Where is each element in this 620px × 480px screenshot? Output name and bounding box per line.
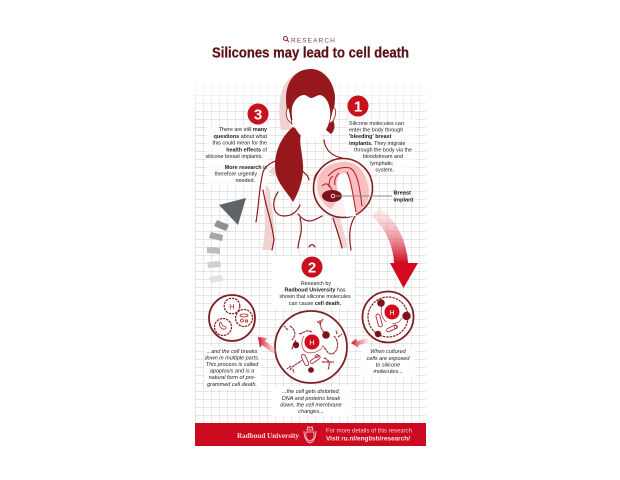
cell: deteriorated, central: H	[309, 338, 315, 347]
text block: right cell caption: to silicone	[376, 362, 400, 368]
text block: step 2: shown that silicone molecules	[279, 294, 351, 300]
text block: right cell caption: molecules...	[373, 369, 403, 375]
text block: centre cell caption	[280, 389, 342, 415]
text block: step 2: can cause cell death.	[289, 301, 342, 307]
footer banner	[195, 423, 426, 446]
text block: right cell caption: When cultured	[370, 349, 407, 355]
logo crest	[304, 426, 316, 443]
ponytail	[275, 127, 303, 202]
text block: step 1: lymphatic	[370, 161, 393, 167]
cell: deteriorated, central	[275, 311, 347, 383]
text block: left cell caption: down in multiple parts.	[205, 356, 259, 362]
text block: step 3: therefore urgently	[215, 172, 257, 178]
face	[292, 95, 330, 140]
cell: apoptosis, broken into parts	[209, 295, 255, 341]
cell: intact, exposed to silicone: H	[389, 310, 395, 317]
logo wordmark: Radboud University	[237, 431, 299, 440]
magnifier: breast implant	[314, 158, 414, 218]
label: Breast	[394, 190, 411, 196]
text block: centre cell caption: down, the cell membrane	[280, 402, 342, 408]
number 3 badge	[248, 104, 268, 124]
number 2 badge	[272, 256, 354, 308]
small heading: research: RESEARCH	[291, 38, 336, 44]
cell: intact, exposed to silicone	[362, 292, 414, 342]
text block: step 1: 'bleeding' breast	[349, 134, 392, 140]
text block: step 2: Research by	[301, 281, 331, 287]
text block: step 3: needed.	[236, 178, 255, 184]
text block: step 1: bloodstream and	[363, 154, 403, 160]
text block: step 1	[349, 121, 412, 174]
number 1 badge: 1	[354, 98, 362, 115]
text block: step 2	[279, 281, 351, 307]
call to action: For more details of this research	[326, 428, 412, 434]
figure shadow	[262, 70, 348, 250]
body outline	[256, 138, 358, 250]
text block: step 1: implants. They migrate	[349, 141, 406, 147]
number 3 badge: 3	[254, 106, 262, 123]
text block: step 1: Silicone molecules can	[349, 121, 404, 127]
text block: right cell caption	[367, 349, 410, 375]
ears	[286, 108, 336, 124]
small arrow: centre to left	[258, 337, 277, 354]
hair	[286, 69, 335, 120]
number 2 badge: 2	[308, 259, 316, 276]
text block: left cell caption	[205, 349, 259, 388]
title: Silicones may lead to cell death	[212, 46, 409, 62]
text block: step 3: health effects of	[226, 148, 267, 154]
text block: left cell caption: apoptosis and is a	[210, 368, 254, 374]
text block: step 3: More research is	[225, 165, 267, 171]
figure of a woman	[256, 69, 358, 250]
text block: step 3: questions about what	[214, 134, 267, 140]
text block: step 3: There are still many	[219, 127, 267, 133]
text block: centre cell caption: ...the cell gets distorted,	[282, 389, 340, 395]
text block: centre cell caption: DNA and proteins break	[282, 396, 340, 402]
text block: left cell caption: This process is called	[206, 362, 259, 368]
text block: step 3: this could mean for the	[212, 140, 267, 146]
implant	[322, 190, 342, 202]
text block: step 2: Radboud University has	[284, 288, 346, 294]
number 1 badge	[348, 96, 368, 116]
text block: step 1: system.	[375, 168, 394, 174]
footer banner: Visit ru.nl/english/research/	[326, 436, 410, 442]
text block: centre cell caption: changes...	[298, 409, 324, 415]
text block: step 3	[205, 127, 267, 184]
text block: step 3: silicone breast implants.	[205, 154, 263, 160]
text block: step 1: through the body via the	[354, 148, 412, 154]
text block: step 1: enter the body through	[349, 128, 403, 134]
small arrow: right to centre	[351, 338, 369, 348]
label: implant	[394, 198, 414, 204]
cell: apoptosis, broken into parts: H	[229, 302, 235, 311]
text block: right cell caption: cells are exposed	[367, 356, 410, 362]
text block: left cell caption: natural form of pro-	[209, 375, 256, 381]
text block: left cell caption: ...and the cell breaks	[207, 349, 258, 355]
grey dashed arrow	[207, 198, 246, 283]
text block: left cell caption: grammed cell death.	[207, 382, 257, 388]
label line	[334, 195, 392, 197]
red curved arrow	[372, 208, 418, 288]
